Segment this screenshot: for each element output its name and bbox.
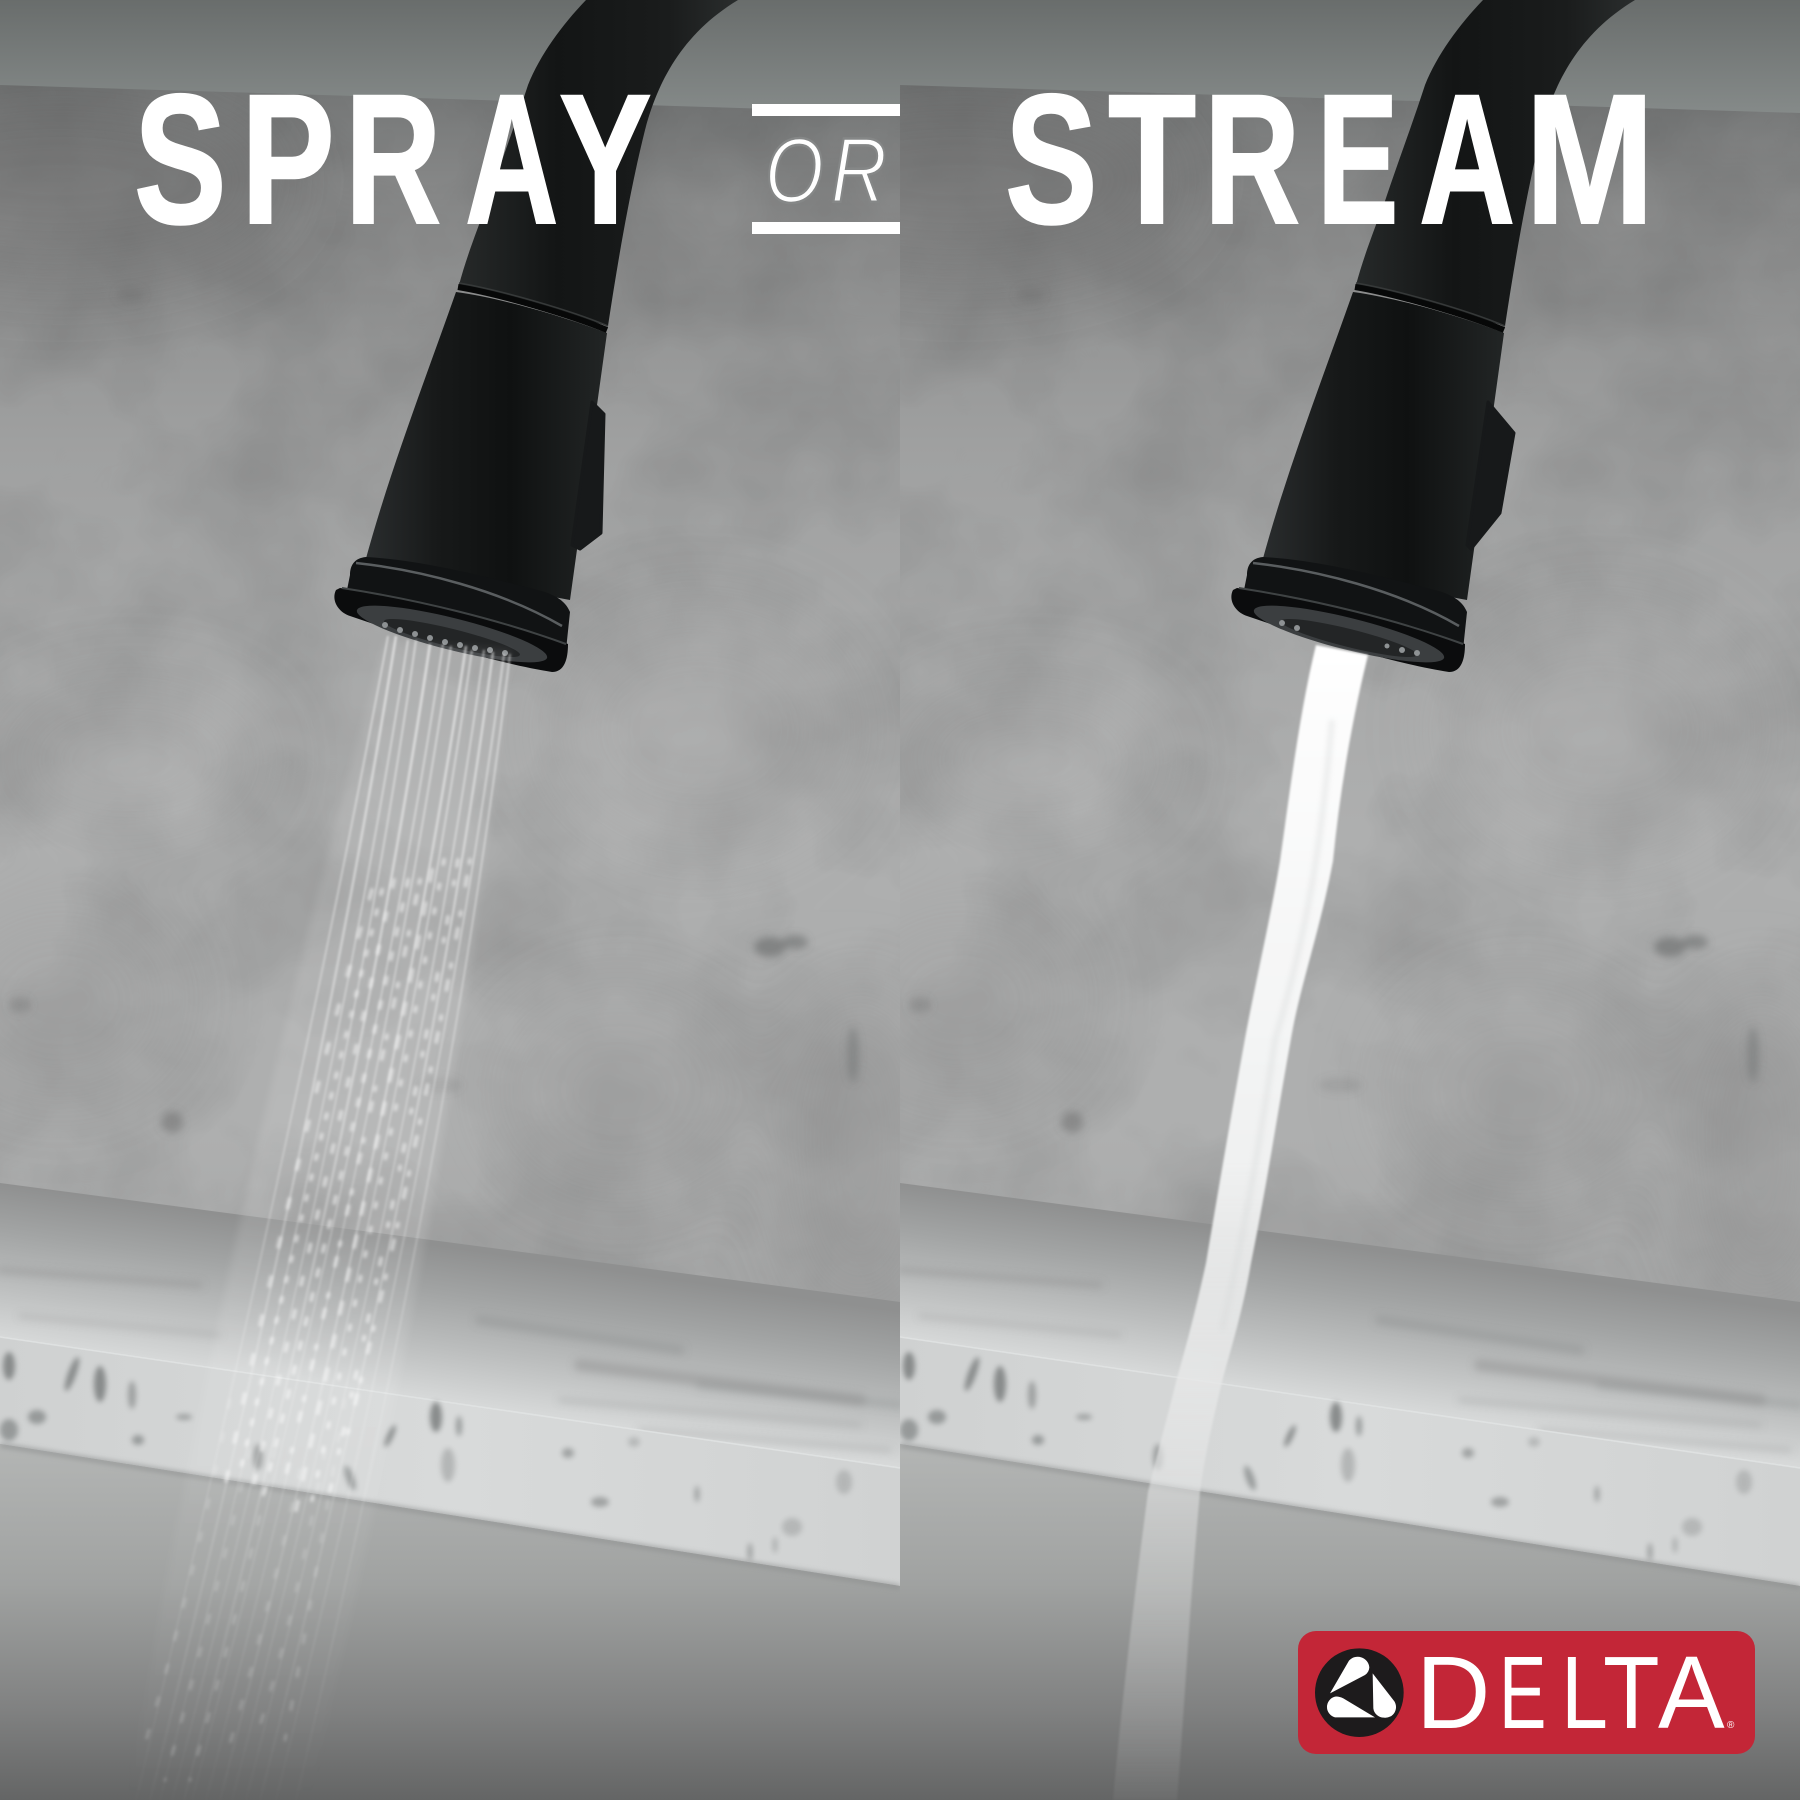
logo: Delta badge	[1298, 1631, 1755, 1754]
icon: right faucet trigger	[1467, 402, 1514, 549]
title: STREAM: M	[1525, 56, 1654, 263]
water: spray streams	[126, 636, 511, 1800]
spray nozzles	[382, 622, 508, 656]
title: SPRAY: P	[241, 55, 335, 262]
logo wordmark: T	[1603, 1634, 1660, 1750]
panel: stream background	[900, 0, 1800, 1800]
logo wordmark	[1416, 1634, 1725, 1750]
title: OR with rules: R	[831, 120, 887, 223]
logo wordmark: L	[1561, 1635, 1608, 1750]
logo wordmark: A	[1658, 1635, 1725, 1750]
title: STREAM: E	[1317, 57, 1398, 263]
icon: Delta triangle mark	[1315, 1648, 1404, 1737]
stream nozzles	[1279, 620, 1420, 656]
panel: spray background	[0, 0, 930, 1800]
title: SPRAY	[134, 55, 652, 263]
title: SPRAY: A	[465, 55, 559, 262]
logo: Delta badge: ®	[1727, 1720, 1735, 1731]
title: STREAM: T	[1108, 57, 1196, 263]
title: SPRAY: Y	[559, 56, 652, 263]
title: SPRAY: R	[345, 57, 441, 263]
title: OR with rules	[752, 104, 900, 234]
spray lower droplets	[140, 1400, 345, 1780]
spray mist	[126, 640, 511, 1800]
icon: left faucet trigger	[572, 402, 604, 549]
spray upper solid streaks	[136, 636, 510, 1800]
title: STREAM: S	[1005, 56, 1098, 263]
title: STREAM	[1005, 56, 1654, 263]
spray droplets	[222, 860, 470, 1510]
title: SPRAY: S	[134, 56, 227, 263]
water: solid stream	[1113, 645, 1368, 1800]
logo wordmark: D	[1416, 1635, 1490, 1750]
title: OR with rules: O	[765, 119, 824, 222]
logo wordmark: E	[1499, 1635, 1546, 1750]
icon: faucet head in stream mode	[1231, 0, 1635, 673]
icon: faucet head in spray mode	[334, 0, 738, 673]
title: STREAM: A	[1419, 57, 1515, 263]
title: STREAM: R	[1204, 57, 1300, 263]
